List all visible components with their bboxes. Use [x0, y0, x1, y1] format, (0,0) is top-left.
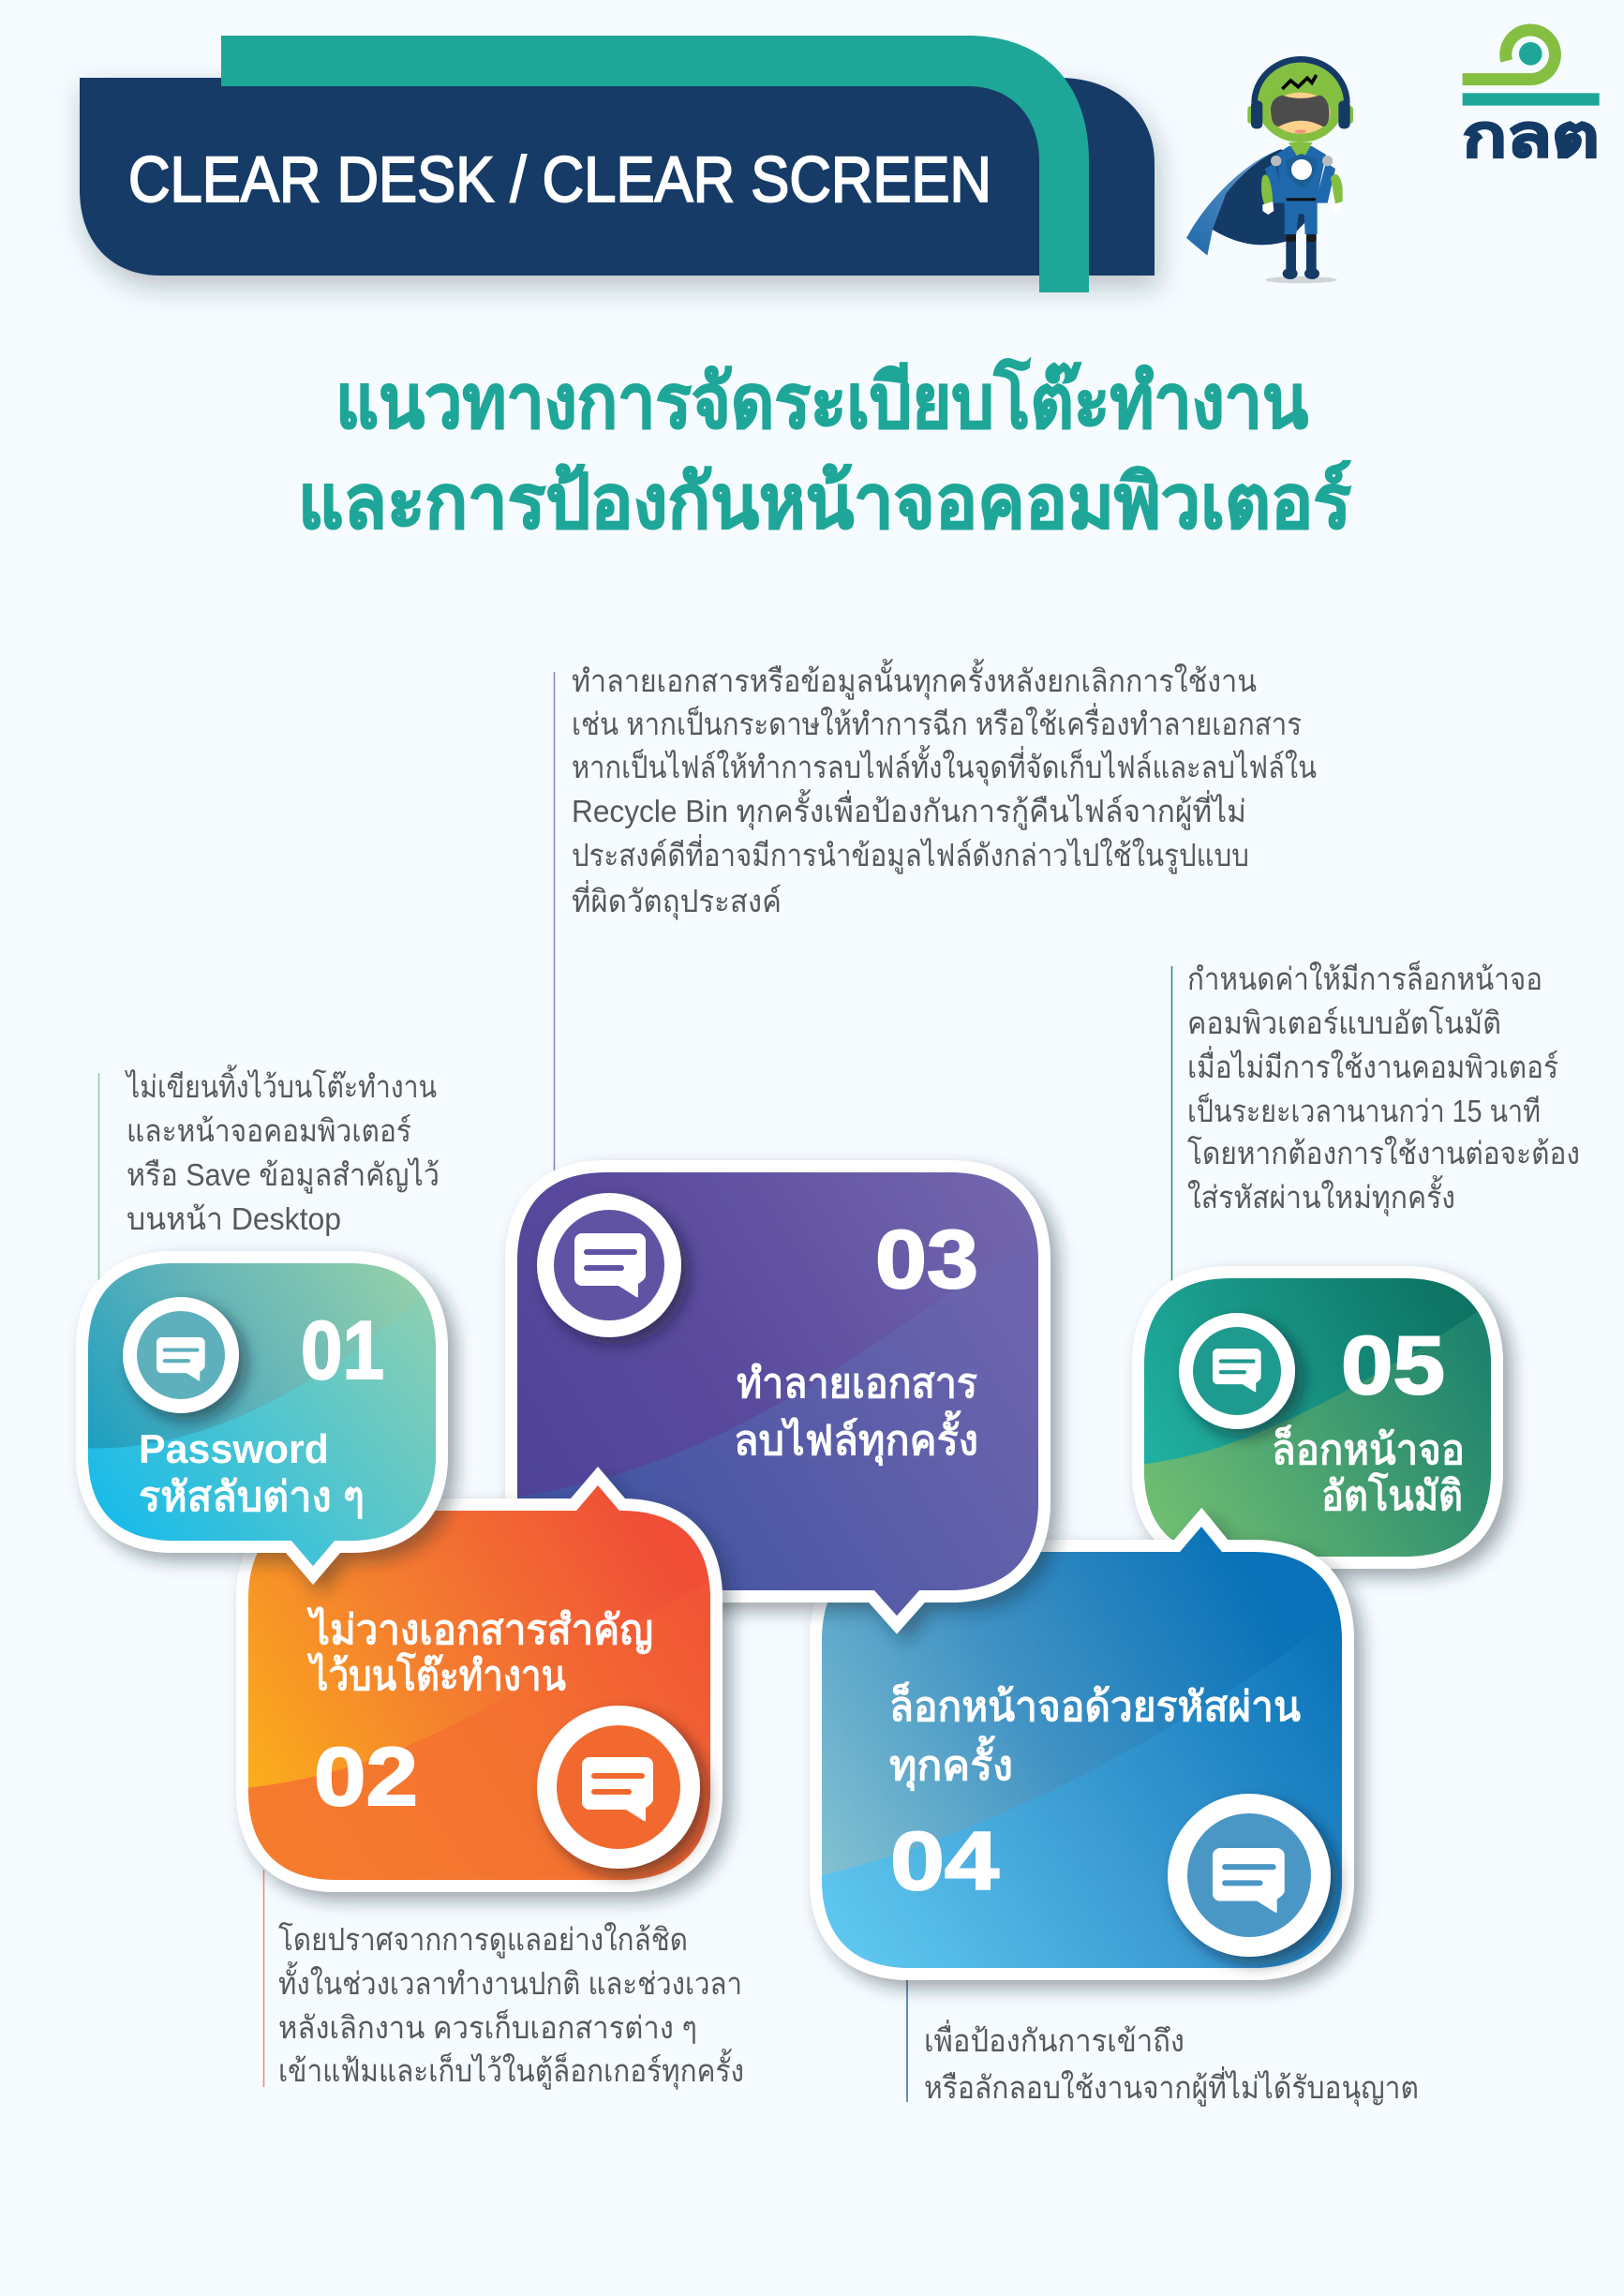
- icon: speech bubble 03: [537, 1193, 681, 1337]
- banner title: CLEAR DESK / CLEAR SCREEN: [128, 143, 991, 216]
- header banner: [80, 36, 1155, 292]
- text block 04: เพื่อป้องกันการเข้าถึง: [924, 2020, 1184, 2058]
- card title 03: ลบไฟล์ทุกครั้ง: [734, 1409, 978, 1467]
- panel: card 02: [244, 1485, 722, 1893]
- icon: speech bubble 04: [1168, 1794, 1331, 1957]
- icon: superhero mascot: [1186, 59, 1353, 283]
- card title 04: ทุกครั้ง: [889, 1735, 1013, 1792]
- card title 01: Password: [139, 1426, 329, 1472]
- text block 05: เป็นระยะเวลานานกว่า 15 นาที: [1187, 1093, 1541, 1128]
- logo bar: [1463, 93, 1600, 106]
- text block 05: เมื่อไม่มีการใช้งานคอมพิวเตอร์: [1187, 1046, 1558, 1084]
- card title 03: [734, 1361, 978, 1467]
- text block 05: คอมพิวเตอร์แบบอัตโนมัติ: [1187, 1006, 1501, 1040]
- number 05: 05: [1341, 1319, 1445, 1411]
- card title 05: อัตโนมัติ: [1321, 1470, 1463, 1519]
- number 02: 02: [314, 1730, 418, 1823]
- main heading: [298, 357, 1351, 544]
- icon: SEC logo: [1463, 30, 1600, 170]
- logo swirl: [1463, 30, 1555, 80]
- card title 03: ทำลายเอกสาร: [737, 1361, 977, 1407]
- card title 04: [889, 1681, 1301, 1792]
- text block 03: ทำลายเอกสารหรือข้อมูลนั้นทุกครั้งหลังยกเลิกการใช้งาน: [572, 659, 1257, 700]
- text block 01: และหน้าจอคอมพิวเตอร์: [127, 1113, 411, 1148]
- text block 05: โดยหากต้องการใช้งานต่อจะต้อง: [1187, 1136, 1580, 1170]
- card title 02: ไม่วางเอกสารสำคัญ: [306, 1605, 653, 1654]
- text block 05: [1171, 961, 1580, 1289]
- card title 04: ล็อกหน้าจอด้วยรหัสผ่าน: [889, 1681, 1301, 1730]
- text block 02: โดยปราศจากการดูแลอย่างใกล้ชิด: [278, 1922, 688, 1959]
- text block 02: หลังเลิกงาน ควรเก็บเอกสารต่าง ๆ: [278, 2009, 697, 2045]
- text block 03: หากเป็นไฟล์ให้ทำการลบไฟล์ทั้งในจุดที่จัดเก็บไฟล์และลบไฟล์ใน: [572, 745, 1317, 786]
- text block 05: ใส่รหัสผ่านใหม่ทุกครั้ง: [1187, 1175, 1455, 1216]
- logo dot: [1519, 42, 1542, 66]
- banner teal ribbon: [221, 36, 1089, 292]
- number 04: 04: [890, 1814, 999, 1907]
- card title 02: [306, 1605, 653, 1699]
- text block 01: ไม่เขียนทิ้งไว้บนโต๊ะทำงาน: [124, 1065, 437, 1104]
- text block 03: Recycle Bin ทุกครั้งเพื่อป้องกันการกู้คืนไฟล์จากผู้ที่ไม่: [572, 789, 1246, 830]
- card title 05: [1272, 1424, 1465, 1519]
- text block 01: บนหน้า Desktop: [127, 1201, 341, 1236]
- text block 04: หรือลักลอบใช้งานจากผู้ที่ไม่ได้รับอนุญาต: [924, 2066, 1419, 2107]
- panel: card 04: [815, 1527, 1349, 1977]
- text block 04: [907, 1973, 1419, 2107]
- text block 01: หรือ Save ข้อมูลสำคัญไว้: [127, 1157, 440, 1194]
- logo wordmark: กลต: [1463, 105, 1600, 170]
- card title 02: ไว้บนโต๊ะทำงาน: [306, 1650, 566, 1699]
- text block 03: ประสงค์ดีที่อาจมีการนำข้อมูลไฟล์ดังกล่าวไปใช้ในรูปแบบ: [572, 834, 1249, 874]
- icon: speech bubble 05: [1179, 1313, 1295, 1429]
- main heading: และการป้องกันหน้าจอคอมพิวเตอร์: [298, 460, 1351, 544]
- number 03: 03: [875, 1213, 978, 1305]
- text block 02: [264, 1870, 744, 2090]
- icon: speech bubble 01: [123, 1297, 239, 1413]
- banner navy panel: [80, 78, 1155, 276]
- card title 01: รหัสลับต่าง ๆ: [139, 1474, 365, 1520]
- panel: card 03: [511, 1172, 1045, 1640]
- text block 02: ทั้งในช่วงเวลาทำงานปกติ และช่วงเวลา: [278, 1961, 742, 2001]
- text block 01: [99, 1065, 440, 1284]
- text block 02: เข้าแฟ้มและเก็บไว้ในตู้ล็อกเกอร์ทุกครั้ง: [278, 2049, 744, 2090]
- panel: card 05: [1139, 1278, 1499, 1574]
- icon: speech bubble 02: [537, 1706, 700, 1869]
- card title 05: ล็อกหน้าจอ: [1272, 1424, 1465, 1473]
- panel: card 01: [84, 1263, 440, 1574]
- card title 01: [139, 1426, 365, 1520]
- main heading: แนวทางการจัดระเบียบโต๊ะทำงาน: [335, 357, 1308, 443]
- text block 03: [555, 659, 1317, 1181]
- text block 03: เช่น หากเป็นกระดาษให้ทำการฉีก หรือใช้เครื่องทำลายเอกสาร: [572, 703, 1302, 741]
- number 01: 01: [301, 1304, 384, 1396]
- text block 03: ที่ผิดวัตถุประสงค์: [572, 880, 782, 920]
- text block 05: กำหนดค่าให้มีการล็อกหน้าจอ: [1187, 961, 1542, 996]
